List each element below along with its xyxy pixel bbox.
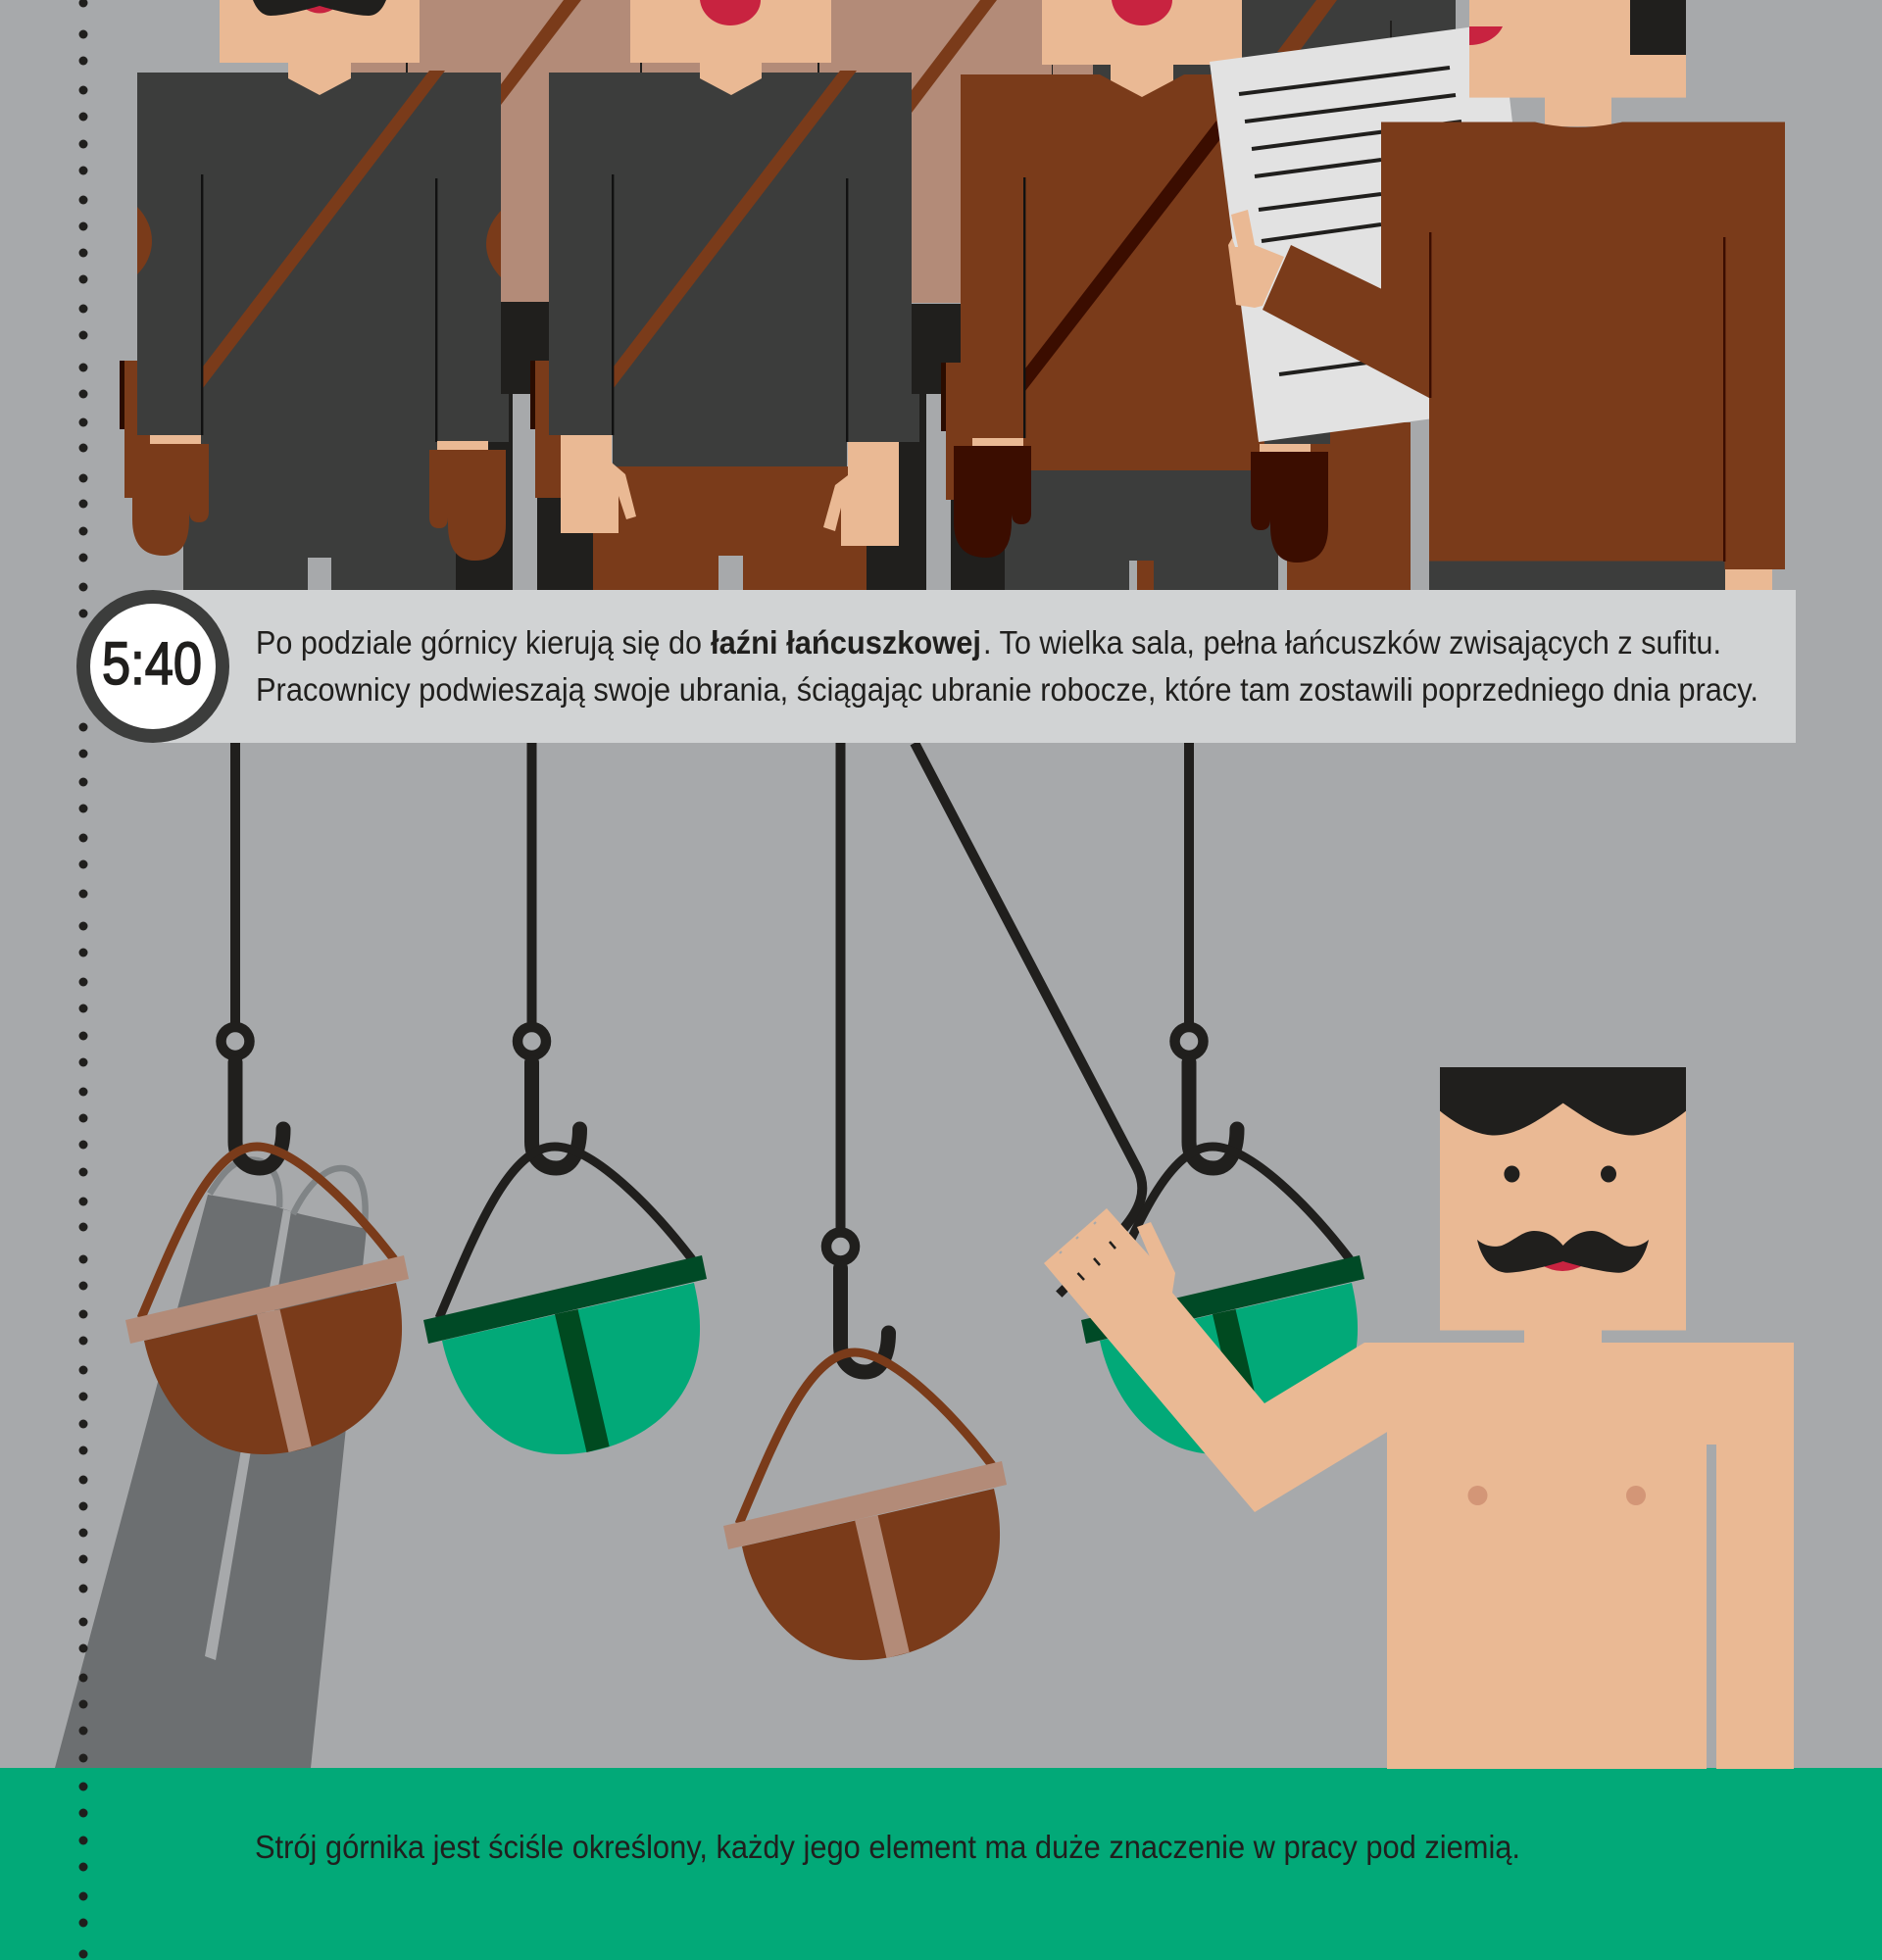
torso and right arm	[1387, 1343, 1794, 1769]
hanging clothes: grey trousers on a hook	[55, 1159, 367, 1768]
back figures: arms	[120, 361, 975, 500]
dotted timeline	[78, 0, 88, 1958]
miner 1: dark clothes, moustache	[132, 0, 509, 590]
chain pulled by the hand	[915, 743, 1142, 1229]
helmet 3: brown	[723, 1352, 1007, 1660]
reader: man in brown shirt	[1228, 0, 1785, 590]
footer band	[0, 1768, 1882, 1960]
chain and hook 2	[518, 743, 580, 1168]
panel: miners standing in line	[120, 0, 1785, 590]
caption text	[256, 624, 1758, 708]
helmet 4: green	[1081, 1147, 1364, 1454]
caption text: Pracownicy podwieszają swoje ubrania, ściągając ubranie robocze, które tam zostawili poprzedniego dnia pracy.	[256, 671, 1758, 708]
caption text: łaźni łańcuszkowej	[711, 624, 981, 661]
chain and hook 4	[1174, 743, 1237, 1168]
miner 2: dark shirt, brown trousers	[549, 0, 919, 590]
back figure: dark shirt behind	[1093, 0, 1456, 74]
helmet 2: green	[423, 1147, 707, 1454]
caption background	[153, 590, 1796, 743]
caption text: Po podziale górnicy kierują się do	[256, 624, 702, 661]
head	[1440, 1067, 1686, 1331]
back figures: tan shirts	[351, 0, 1411, 590]
neck	[1524, 1330, 1602, 1344]
miner 3: brown shirt, dark trousers	[954, 0, 1328, 590]
helmet 1: brown	[125, 1147, 409, 1454]
time badge: 5:40	[102, 630, 202, 697]
arm and hand	[1044, 1208, 1412, 1512]
reader: sheet of paper with list	[1210, 26, 1512, 442]
nipples	[1468, 1486, 1646, 1505]
chain and hook 1	[222, 743, 283, 1168]
shirtless miner pulling the chain	[1044, 1067, 1794, 1769]
footer text: Strój górnika jest ściśle określony, każdy jego element ma duże znaczenie w pracy pod ziemią.	[255, 1829, 1520, 1865]
caption text: . To wielka sala, pełna łańcuszków zwisających z sufitu.	[983, 624, 1721, 661]
chain and hook 3	[826, 743, 888, 1372]
panel: 5:40 caption	[76, 590, 1796, 743]
time badge	[76, 590, 229, 743]
